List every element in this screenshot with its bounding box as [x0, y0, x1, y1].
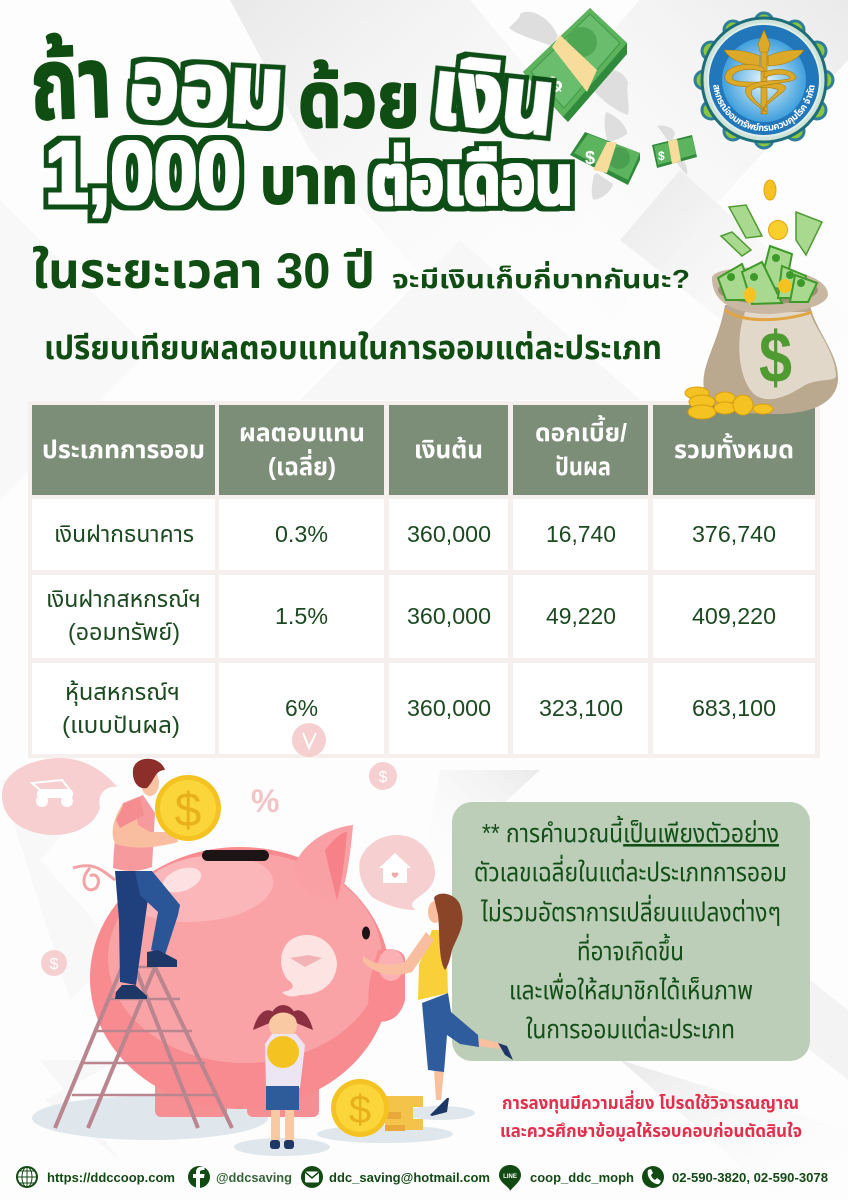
title: เงิน — [427, 40, 559, 154]
table row: cooperative shares: 360,000 — [407, 695, 491, 721]
table row: cooperative shares: 323,100 — [539, 695, 623, 721]
table row: bank deposit: 376,740 — [692, 521, 776, 547]
icon: flying money bundles — [509, 8, 697, 200]
callout panel: disclaimer: ไม่รวมอัตราการเปลี่ยนแปลงต่างๆ — [480, 894, 781, 927]
warning text: และควรศึกษาข้อมูลให้รอบคอบก่อนตัดสินใจ — [500, 1121, 802, 1142]
icon: line — [499, 1165, 521, 1191]
illustration: coins stack — [331, 1079, 423, 1137]
title: ต่อเดือน — [371, 141, 573, 219]
table header: (เฉลี่ย) — [268, 449, 336, 481]
title — [29, 27, 573, 222]
warning text: การลงทุนมีความเสี่ยง โปรดใช้วิจารณญาณ — [502, 1090, 799, 1114]
table row: cooperative deposit: 49,220 — [546, 603, 616, 629]
footer contact bar: @ddcsaving — [216, 1170, 292, 1185]
table row: cooperative deposit: 360,000 — [407, 603, 491, 629]
icon: line: LINE — [503, 1174, 517, 1180]
icon: phone — [642, 1166, 664, 1188]
title: 1,000 — [45, 123, 241, 222]
footer contact bar: coop_ddc_moph — [530, 1170, 634, 1185]
illustration: decorative bubbles: $ — [379, 769, 388, 786]
illustration: piggy bank — [73, 825, 405, 1117]
callout panel: disclaimer: ที่อาจเกิดขึ้น — [577, 933, 684, 966]
subtitle: ในระยะเวลา 30 ปี — [32, 243, 375, 299]
callout panel: disclaimer: ตัวเลขเฉลี่ยในแต่ละประเภทการออม — [474, 854, 787, 887]
heading: comparison: เปรียบเทียบผลตอบแทนในการออมแต่ละประเภท — [44, 329, 662, 366]
illustration: ladder — [55, 967, 232, 1128]
icon: money bag — [685, 180, 838, 419]
icon: check badge — [292, 723, 326, 757]
illustration: man with coin — [113, 759, 221, 999]
icon: email — [301, 1166, 323, 1188]
table row: cooperative shares: (แบบปันผล) — [62, 712, 180, 738]
icon: flying money bundles: $ — [658, 149, 665, 163]
illustration: decorative bubbles: $ — [50, 956, 59, 973]
table header — [32, 405, 815, 495]
illustration: man with coin: $ — [175, 784, 201, 837]
table row: bank deposit: เงินฝากธนาคาร — [54, 521, 194, 547]
table header: ปันผล — [555, 453, 611, 481]
icon: flying money bundles: $ — [540, 70, 569, 99]
table row: bank deposit: 16,740 — [546, 521, 616, 547]
subtitle: จะมีเงินเก็บกี่บาทกันนะ? — [392, 261, 690, 294]
table row: bank deposit: 360,000 — [407, 521, 491, 547]
table header: รวมทั้งหมด — [674, 433, 794, 464]
subtitle — [32, 243, 690, 299]
callout panel: disclaimer: ** การคำนวณนี้เป็นเพียงตัวอย่าง — [482, 815, 779, 848]
illustration: woman pushing pig — [363, 894, 513, 1116]
illustration: girl with coin — [253, 1005, 313, 1149]
icon: facebook — [188, 1166, 210, 1188]
illustration: coins stack: $ — [349, 1088, 371, 1132]
footer contact bar: ddc_saving@hotmail.com — [329, 1170, 490, 1185]
table row: cooperative shares: 6% — [285, 695, 318, 721]
callout panel: disclaimer: ในการออมแต่ละประเภท — [526, 1014, 735, 1044]
title: ด้วย — [298, 56, 420, 144]
illustration: decorative bubbles: % — [251, 783, 279, 819]
footer contact bar: https://ddccoop.com — [47, 1170, 175, 1185]
table row: cooperative deposit — [32, 575, 815, 658]
table header: เงินต้น — [414, 436, 483, 464]
table row: cooperative deposit: 409,220 — [692, 603, 776, 629]
table row: cooperative deposit: เงินฝากสหกรณ์ฯ — [46, 586, 201, 612]
illustration: decorative bubbles — [2, 758, 435, 976]
icon: flying money bundles: $ — [585, 148, 595, 168]
illustration: floor shadows — [32, 1096, 475, 1156]
table row: bank deposit: 0.3% — [275, 521, 328, 547]
logo: cooperative seal — [694, 12, 834, 150]
table row: bank deposit — [32, 499, 815, 570]
table header: ประเภทการออม — [42, 436, 205, 464]
footer contact bar: 02-590-3820, 02-590-3078 — [672, 1170, 828, 1185]
table row: cooperative shares — [32, 663, 815, 754]
title: ถ้า — [29, 27, 113, 141]
table row: cooperative shares: หุ้นสหกรณ์ฯ — [65, 679, 180, 706]
callout panel: disclaimer — [452, 802, 810, 1061]
callout panel: disclaimer: และเพื่อให้สมาชิกได้เห็นภาพ — [509, 972, 753, 1005]
table header: ผลตอบแทน — [239, 419, 365, 447]
table row: cooperative deposit: (ออมทรัพย์) — [68, 619, 180, 645]
footer contact bar — [17, 1165, 828, 1191]
table: savings comparison — [28, 401, 820, 758]
warning text — [500, 1090, 802, 1142]
title: ออม — [127, 30, 286, 145]
logo: cooperative seal: สหกรณ์ออมทรัพย์กรมควบคุมโรค จำกัด — [713, 84, 815, 131]
table row: cooperative shares: 683,100 — [692, 695, 776, 721]
table header: ดอกเบี้ย/ — [535, 415, 627, 447]
table row: cooperative deposit: 1.5% — [275, 603, 328, 629]
icon: money bag: $ — [759, 318, 792, 398]
title: บาท — [260, 143, 358, 217]
icon: website — [17, 1167, 37, 1187]
